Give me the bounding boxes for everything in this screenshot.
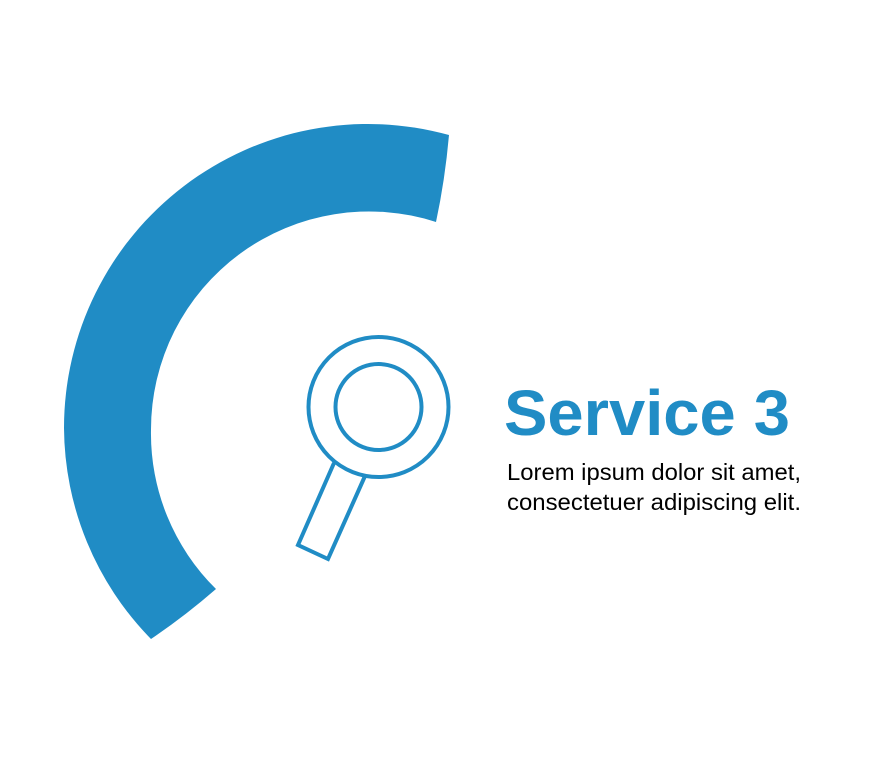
body line 1: Lorem ipsum dolor sit amet, xyxy=(507,459,801,485)
heading: Service 3 xyxy=(504,377,790,449)
magnifier outer ring xyxy=(308,337,448,477)
magnifier lens xyxy=(336,364,422,450)
ring segment xyxy=(64,124,449,639)
icon: magnifying glass xyxy=(298,337,448,559)
magnifier handle xyxy=(298,463,365,559)
body text xyxy=(507,459,801,515)
body line 2: consectetuer adipiscing elit. xyxy=(507,489,801,515)
